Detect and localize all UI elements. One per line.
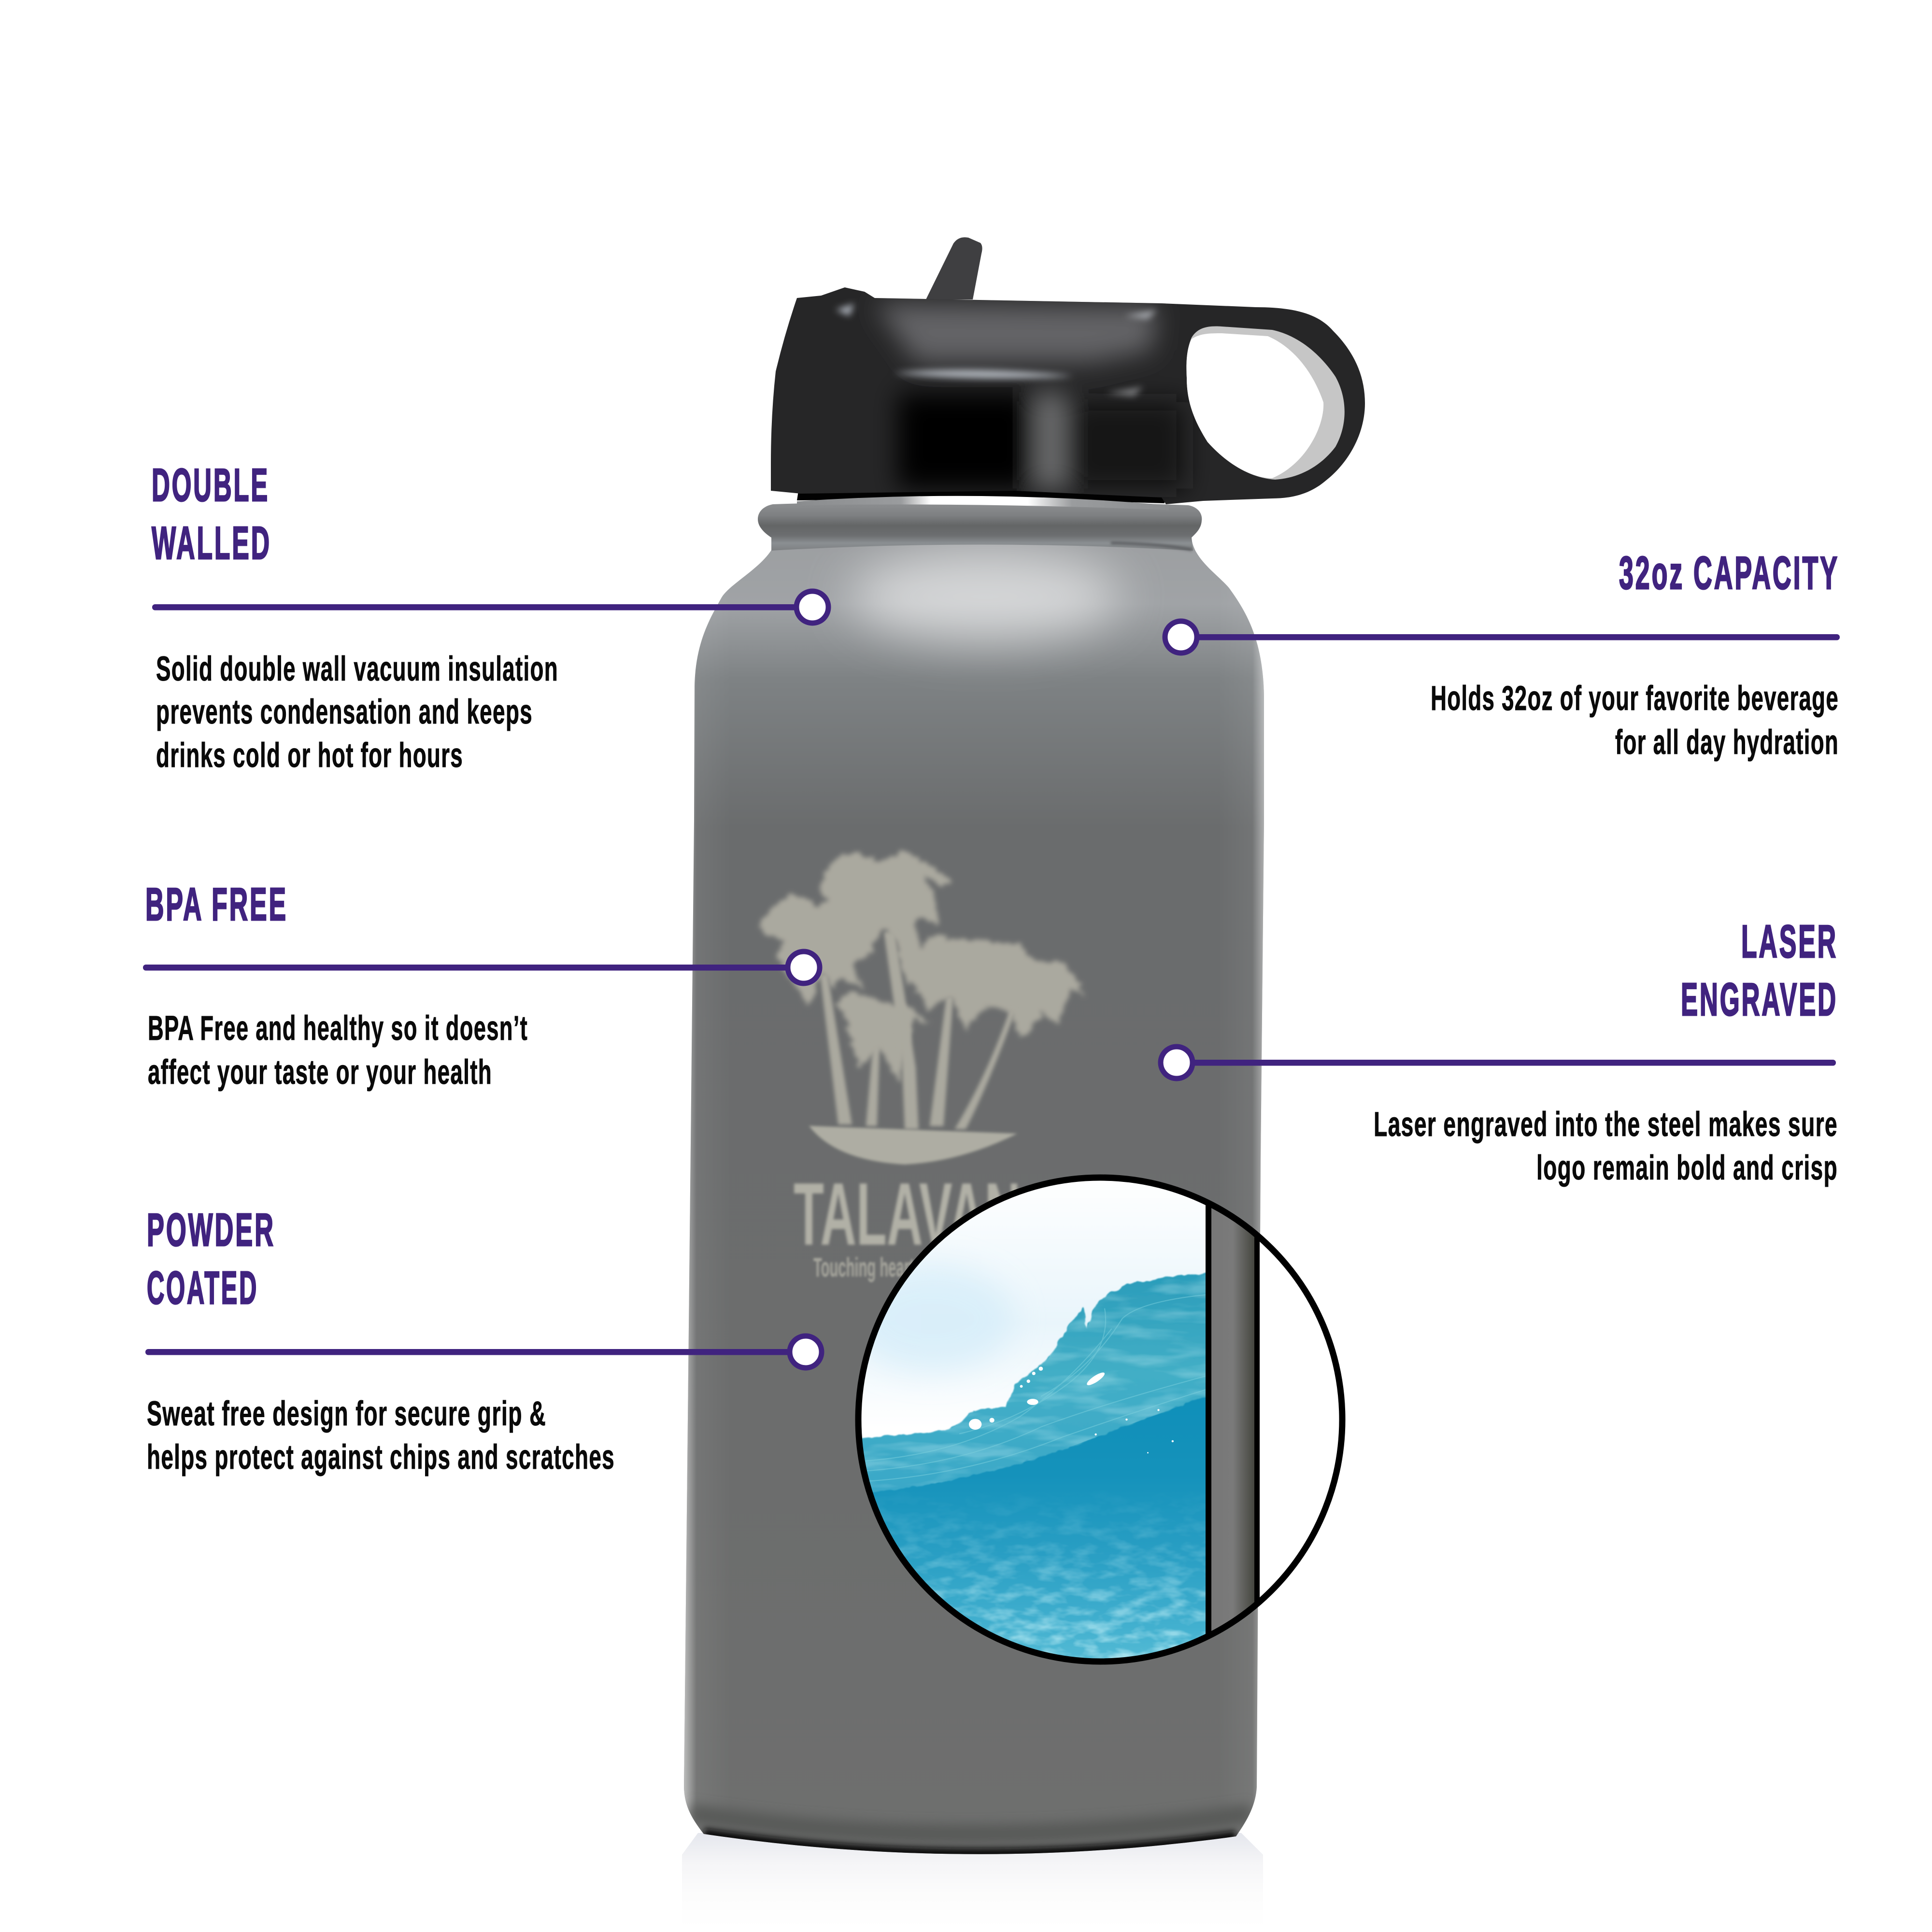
heading: COATED bbox=[147, 1262, 258, 1314]
straw bbox=[926, 237, 982, 299]
description: Solid double wall vacuum insulation bbox=[156, 650, 558, 688]
heading bbox=[1681, 916, 1838, 1025]
description bbox=[156, 650, 558, 775]
pointer bbox=[1161, 1047, 1836, 1079]
description bbox=[147, 1395, 615, 1477]
heading bbox=[152, 459, 271, 569]
description: prevents condensation and keeps bbox=[156, 693, 533, 731]
seabed caustics bbox=[879, 1504, 1206, 1659]
heading: POWDER bbox=[147, 1204, 275, 1256]
bottle bbox=[676, 237, 1365, 1874]
bottle reflection bbox=[682, 1833, 1263, 1932]
bottle cap bbox=[771, 237, 1365, 504]
pointer bbox=[143, 952, 820, 983]
bottle body bbox=[676, 531, 1275, 1874]
callout: 32oz capacity bbox=[1165, 547, 1840, 762]
bottle wall cross-section bbox=[1206, 1205, 1260, 1634]
callout: double walled bbox=[152, 459, 828, 775]
palm trunks bbox=[820, 932, 1016, 1129]
callout: BPA free bbox=[143, 879, 820, 1092]
description bbox=[148, 1009, 528, 1092]
foam highlights bbox=[969, 1367, 1174, 1453]
palm crowns bbox=[758, 852, 1085, 1080]
sea scene bbox=[853, 1271, 1208, 1668]
description bbox=[1374, 1106, 1838, 1187]
heading: BPA FREE bbox=[145, 879, 288, 930]
bottle neck ring bbox=[758, 501, 1202, 551]
heading: LASER bbox=[1741, 916, 1838, 967]
cap gasket and silver rim bbox=[797, 484, 1169, 510]
logo wordmark: TALAVAN bbox=[794, 1164, 1021, 1264]
description bbox=[1431, 680, 1839, 762]
callout: powder coated bbox=[145, 1204, 822, 1477]
description: helps protect against chips and scratches bbox=[147, 1438, 615, 1477]
description: drinks cold or hot for hours bbox=[156, 737, 463, 775]
sky bbox=[864, 1229, 1206, 1389]
magnified lens: insulated wall bbox=[850, 1174, 1351, 1668]
callout: laser engraved bbox=[1161, 916, 1838, 1187]
description: Sweat free design for secure grip & bbox=[147, 1395, 546, 1433]
description: BPA Free and healthy so it doesn’t bbox=[148, 1009, 528, 1048]
handle loop opening bbox=[1186, 327, 1345, 480]
pointer bbox=[152, 591, 828, 623]
pointer bbox=[1165, 621, 1840, 653]
engraved logo bbox=[758, 852, 1085, 1282]
heading: WALLED bbox=[152, 517, 271, 569]
logo tagline: Touching hearts bbox=[813, 1252, 922, 1282]
heading: DOUBLE bbox=[152, 459, 270, 511]
heading bbox=[147, 1204, 275, 1314]
island bbox=[809, 1126, 1017, 1165]
description: affect your taste or your health bbox=[148, 1053, 492, 1092]
cap shading bbox=[836, 304, 1185, 488]
pointer bbox=[145, 1336, 822, 1368]
